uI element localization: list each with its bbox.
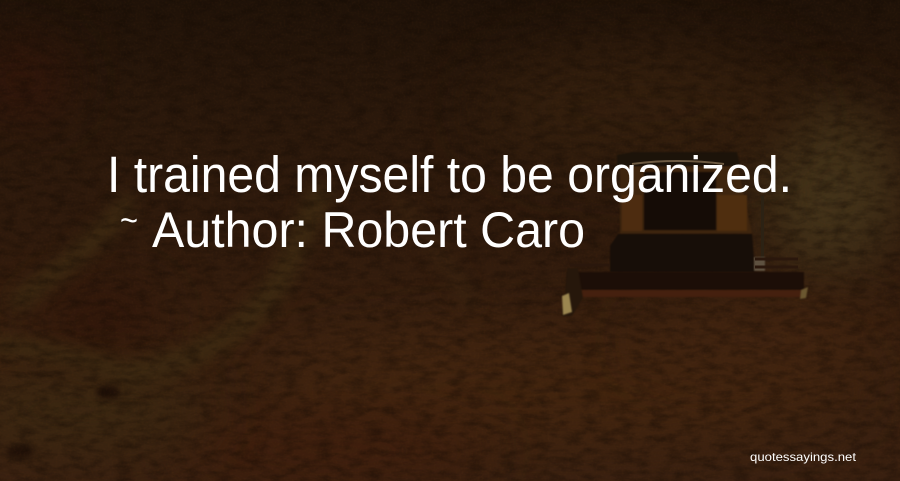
field furrows	[0, 195, 470, 378]
harvester cutter strip	[580, 290, 802, 297]
harvester right tip	[800, 287, 808, 299]
harvester cab body	[620, 166, 752, 234]
field dark spots	[6, 385, 120, 458]
harvester windshield	[644, 172, 716, 230]
harvester left tip	[562, 293, 572, 315]
harvester bright patch	[754, 257, 765, 271]
watermark: quotessayings.net	[750, 450, 857, 464]
harvester reel rails	[570, 259, 798, 267]
author line: Author: Robert Caro	[152, 202, 585, 258]
quote text: I trained myself to be organized.	[107, 146, 792, 203]
tilde: ~	[120, 202, 138, 240]
harvester right mast	[761, 196, 764, 258]
harvester roof	[617, 152, 740, 166]
harvester lower body	[610, 234, 755, 272]
harvester left divider	[562, 268, 583, 316]
upper right sky haze	[760, 105, 900, 275]
harvester header bar	[567, 272, 804, 290]
harvester left panel	[622, 195, 642, 231]
harvester roof light strip	[632, 161, 724, 164]
harvester orange panel	[717, 195, 747, 231]
harvester	[562, 152, 808, 316]
